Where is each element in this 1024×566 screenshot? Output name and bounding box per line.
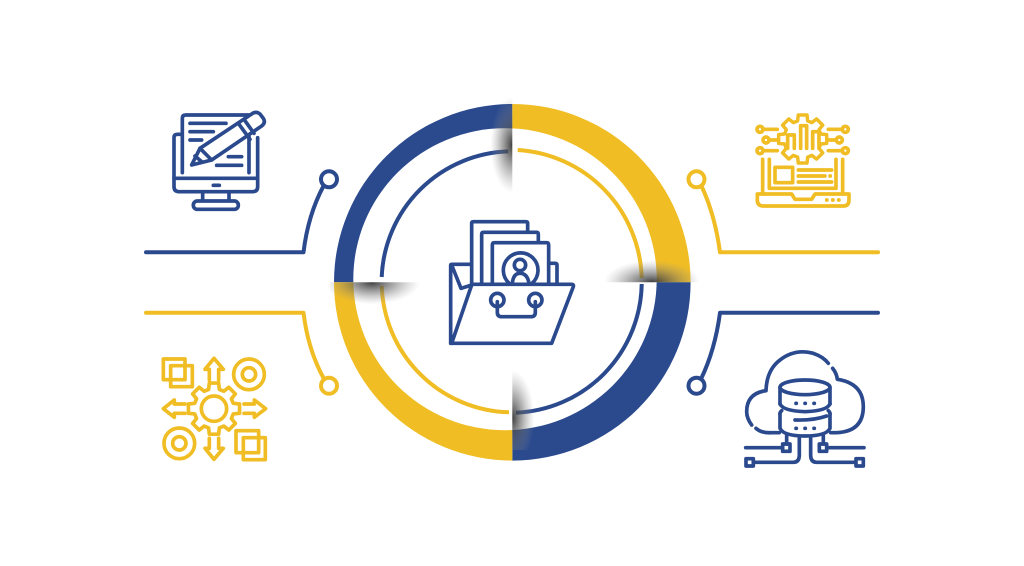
- ring shadows: [324, 97, 700, 466]
- icon: cloud database: [746, 352, 864, 466]
- connector: bottom right: [688, 313, 878, 394]
- icon: laptop with gear and chart: [757, 115, 849, 206]
- inner ring arcs: [382, 150, 642, 413]
- connector: top right: [688, 171, 878, 252]
- icon: gear with arrows: [163, 358, 266, 460]
- infographic canvas: [144, 100, 880, 468]
- outer ring: [334, 104, 691, 461]
- connector: bottom left: [146, 313, 337, 394]
- icon: document folder: [451, 222, 573, 343]
- connector: top left: [146, 171, 337, 252]
- icon: monitor with pencil: [174, 112, 264, 209]
